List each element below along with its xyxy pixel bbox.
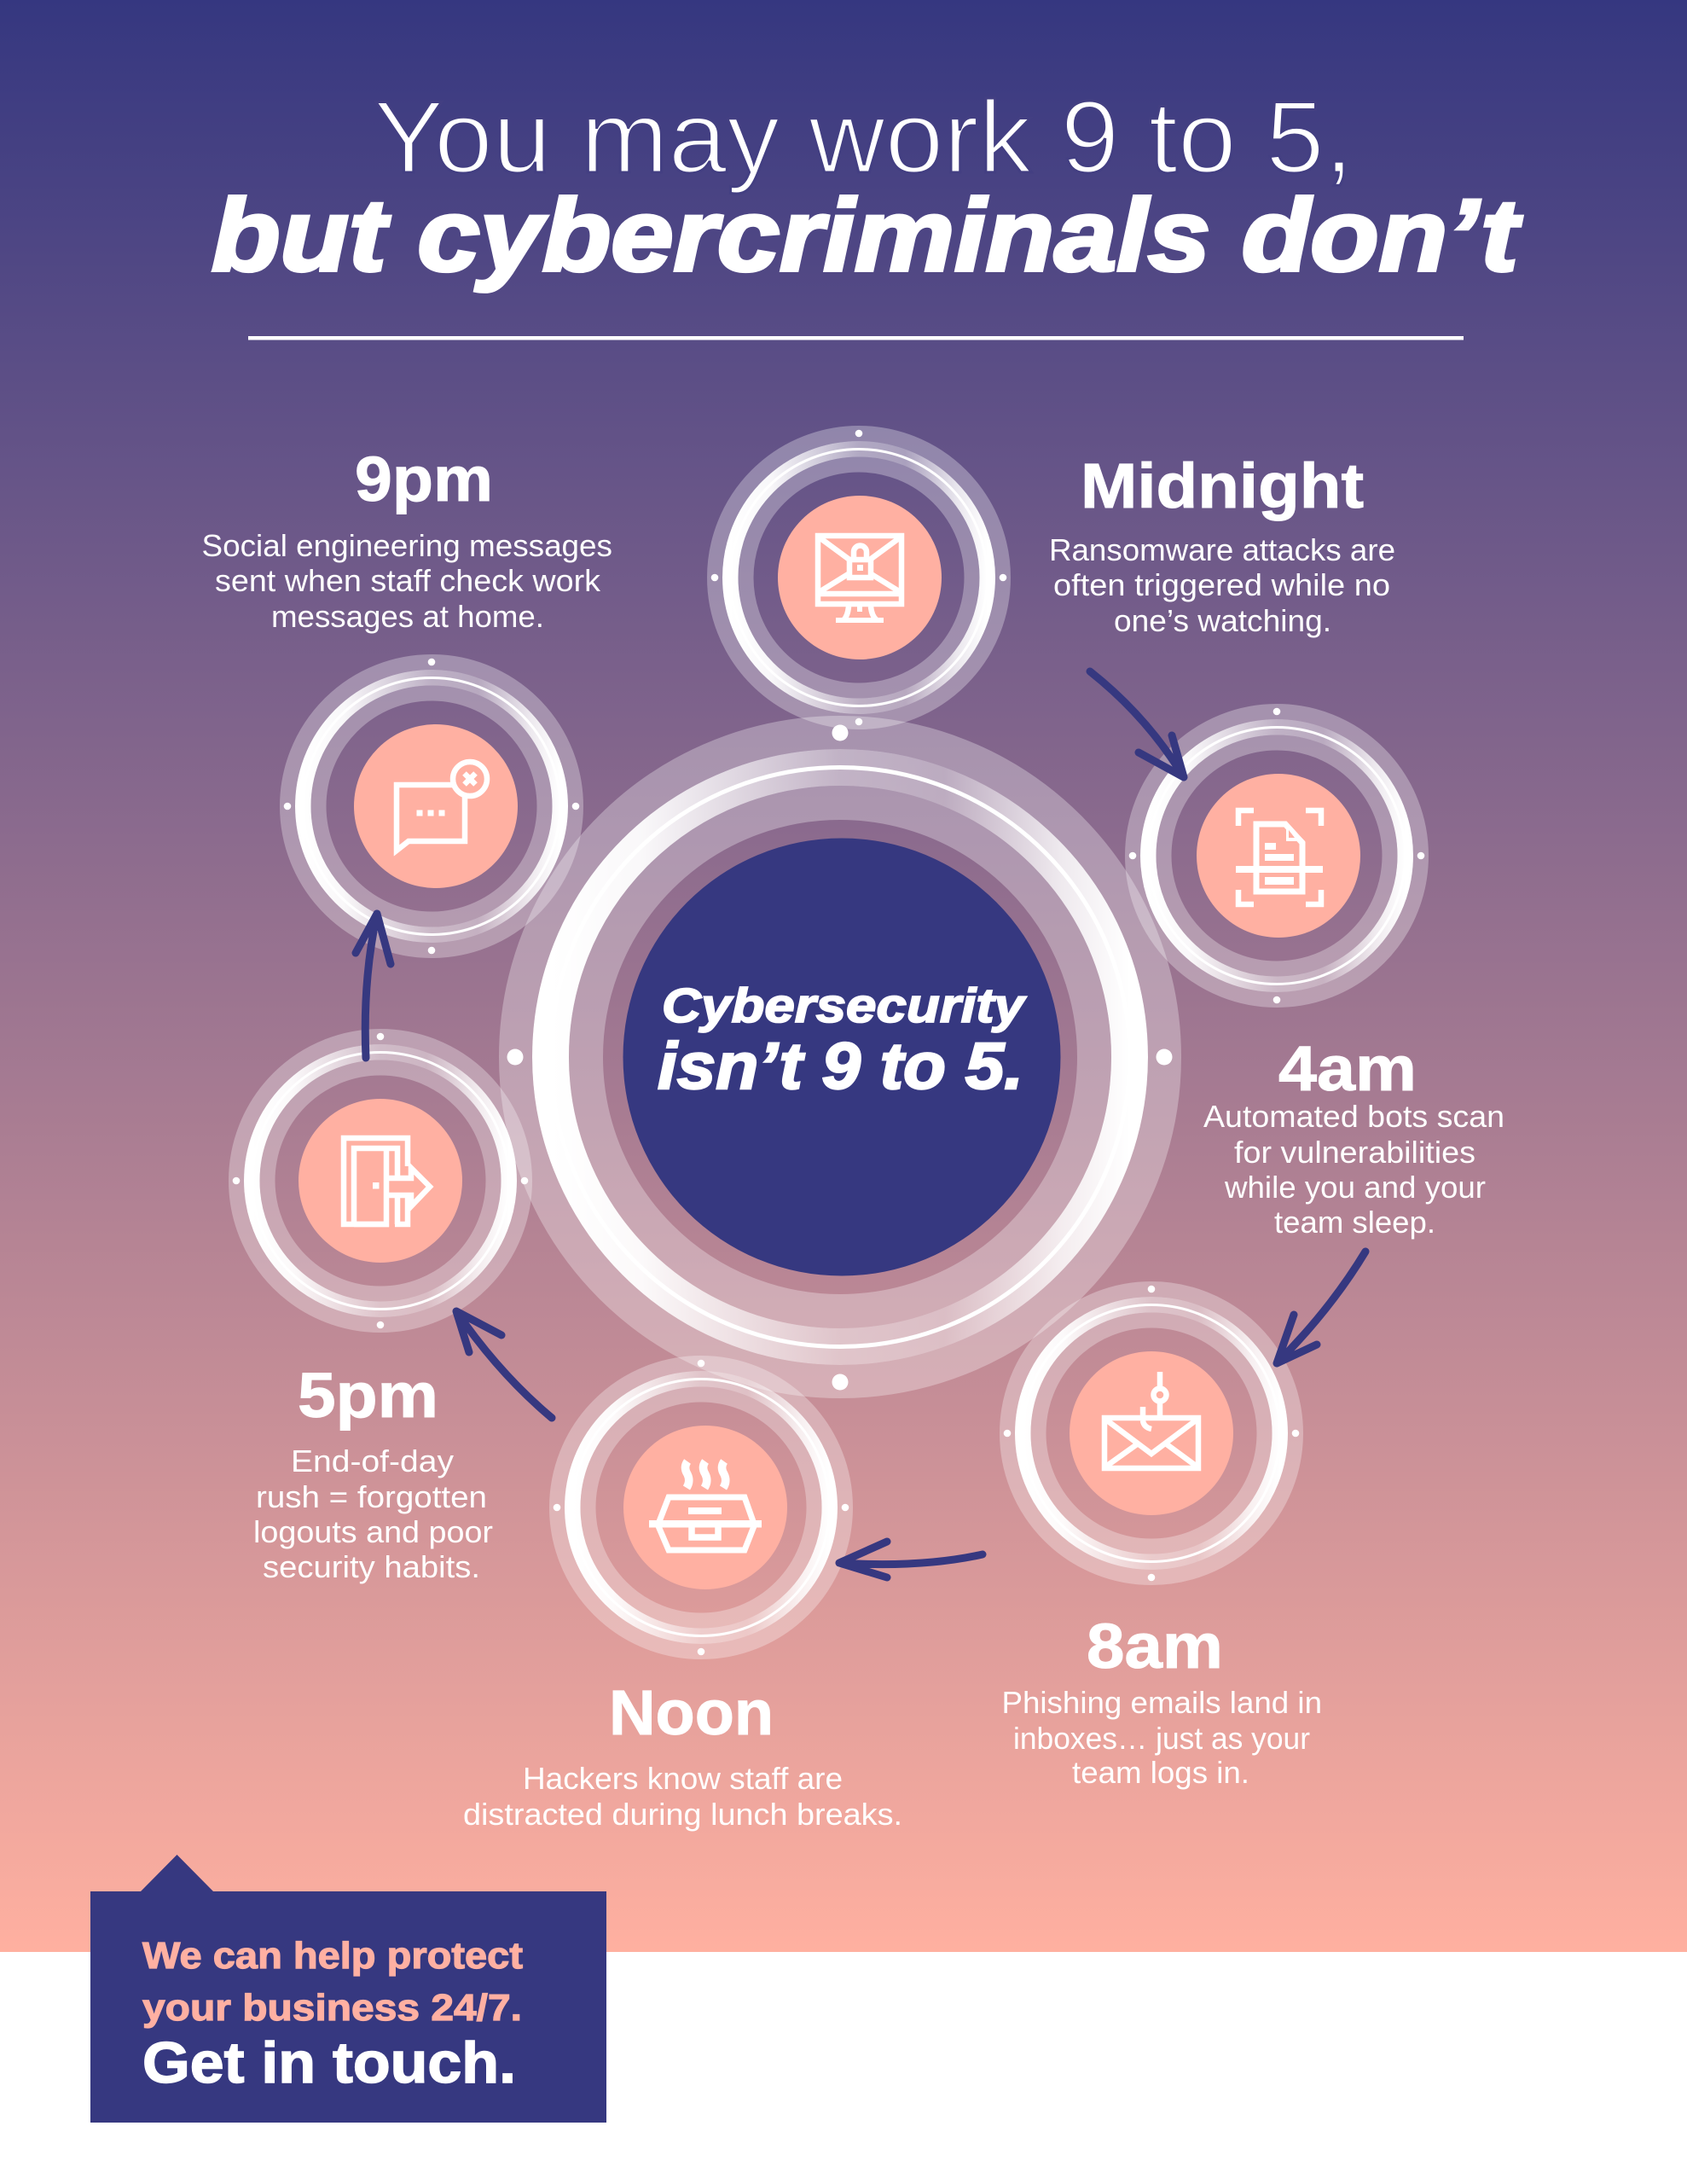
label: 5pm: End-of-day [291, 1443, 454, 1478]
title [212, 80, 1523, 293]
central text [658, 979, 1028, 1103]
label: 5pm: security habits. [263, 1549, 480, 1584]
central hub circle [507, 725, 1172, 1391]
label: 4am: team sleep. [1274, 1205, 1435, 1240]
label: 9pm: Social engineering messages [201, 528, 612, 563]
label: 5pm: rush = forgotten [256, 1479, 487, 1514]
title: You may work 9 to 5, [374, 80, 1354, 195]
label: midnight: Midnight [1081, 450, 1364, 521]
label: midnight [1049, 450, 1395, 638]
label: 8am: team logs in. [1072, 1755, 1249, 1790]
node: noon lunch [554, 1360, 849, 1655]
title divider [248, 336, 1464, 340]
label: noon [463, 1677, 902, 1832]
node: 8am phishing [1004, 1286, 1299, 1581]
label: 5pm: 5pm [298, 1360, 438, 1431]
label: noon: distracted during lunch breaks. [463, 1797, 902, 1832]
node: 5pm door [233, 1033, 528, 1328]
callout: get in touch: We can help protect [142, 1935, 523, 1977]
callout: get in touch [90, 1855, 606, 2123]
label: 9pm: messages at home. [271, 599, 544, 634]
central text: Cybersecurity [662, 979, 1028, 1033]
arrow: 8am to noon [839, 1542, 983, 1577]
node: midnight [711, 430, 1006, 725]
label: 8am: Phishing emails land in [1001, 1685, 1322, 1720]
arrow: 4am to 8am [1277, 1252, 1365, 1363]
label: 8am [1001, 1611, 1322, 1790]
icon: steaming lunch box [649, 1461, 762, 1550]
node: 9pm chat [284, 659, 579, 954]
label: 8am: 8am [1087, 1611, 1223, 1682]
label: 9pm [201, 444, 612, 634]
label: 4am: Automated bots scan [1203, 1099, 1504, 1134]
label: 5pm: logouts and poor [253, 1514, 493, 1549]
label: 8am: inboxes… just as your [1013, 1721, 1310, 1756]
label: 4am: while you and your [1224, 1170, 1486, 1205]
icon: document scan [1236, 810, 1323, 904]
label: noon: Noon [609, 1677, 774, 1748]
title: but cybercriminals don’t [212, 178, 1523, 293]
icon: chat bubble with x [397, 762, 487, 851]
central text: isn’t 9 to 5. [658, 1030, 1023, 1103]
icon: phishing envelope [1104, 1372, 1198, 1468]
label: midnight: often triggered while no [1053, 567, 1390, 602]
label: noon: Hackers know staff are [523, 1761, 843, 1796]
label: 4am: for vulnerabilities [1234, 1135, 1475, 1170]
label: 9pm: 9pm [355, 444, 493, 514]
label: midnight: one’s watching. [1114, 603, 1331, 638]
label: 4am: 4am [1278, 1033, 1417, 1104]
label: midnight: Ransomware attacks are [1049, 532, 1395, 567]
label: 4am [1203, 1033, 1504, 1240]
icon: locked monitor [818, 536, 901, 623]
arrow: noon to 5pm [456, 1311, 552, 1418]
label: 9pm: sent when staff check work [215, 563, 601, 598]
callout: get in touch: Get in touch. [142, 2030, 516, 2095]
node: 4am document scan [1129, 708, 1424, 1003]
callout: get in touch: your business 24/7. [142, 1987, 522, 2029]
arrow: midnight to 4am [1090, 671, 1184, 777]
arrow: 5pm to 9pm [356, 914, 391, 1058]
label: 5pm [253, 1360, 493, 1584]
icon: exit door [344, 1138, 430, 1224]
